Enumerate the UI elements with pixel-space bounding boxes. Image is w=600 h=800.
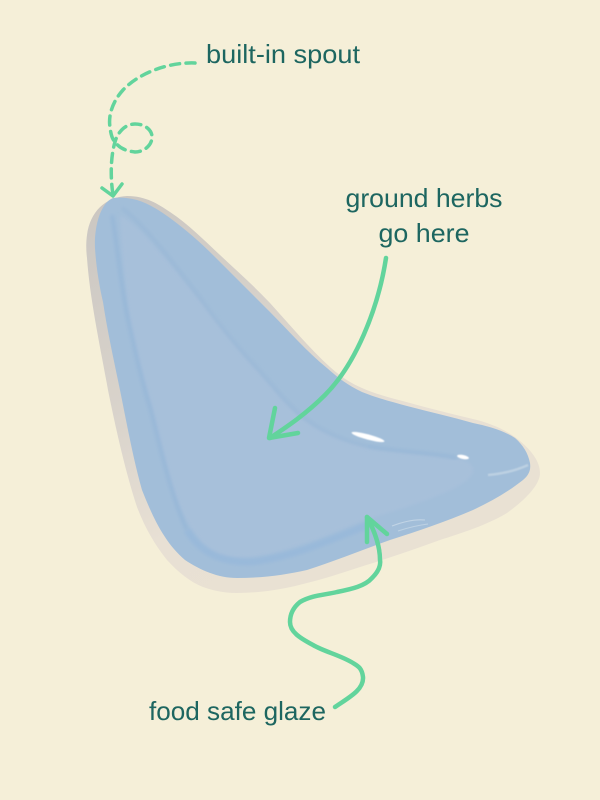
glaze shading (112, 208, 528, 562)
dish (86, 196, 540, 593)
arrow: to glaze (290, 517, 387, 707)
infographic canvas: go here (378, 218, 470, 248)
label: ground herbs go here: ground herbs (346, 183, 502, 213)
dish glaze (95, 198, 530, 578)
label: built-in spout: built-in spout (206, 39, 361, 69)
label: food safe glaze: food safe glaze (149, 696, 326, 726)
infographic canvas (86, 44, 540, 726)
arrow: to herb area (269, 258, 386, 438)
glaze highlights (351, 430, 469, 460)
arrow: dashed loop to spout (102, 63, 195, 196)
dish rim (86, 196, 540, 593)
